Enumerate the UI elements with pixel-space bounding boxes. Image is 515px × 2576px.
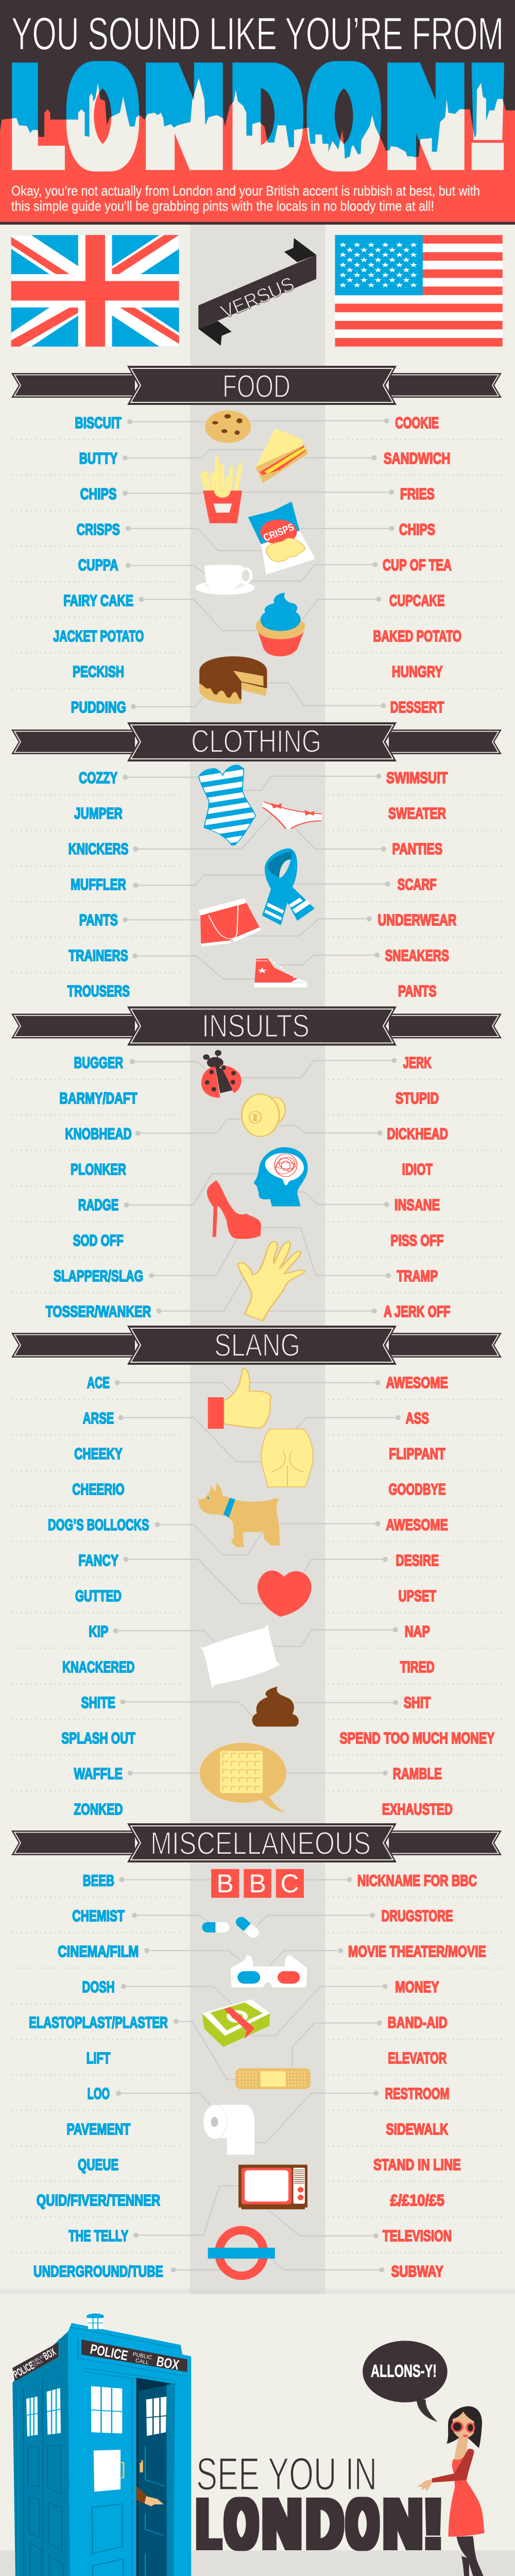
american terms: PANTIES [392,839,442,858]
icon: pillow [199,1624,280,1688]
british terms: TRAINERS [68,946,128,964]
police box signs: CALL [32,2359,44,2367]
icon: underground roundel [208,2230,275,2276]
icon: pills [202,1915,261,1940]
icon: crisps bag [248,502,315,574]
icon: ladybird [201,1050,242,1098]
police box signs [11,2341,180,2381]
british terms: QUID/FIVER/TENNER [37,2191,160,2209]
british terms: TROUSERS [67,981,130,1000]
british terms: PLONKER [71,1160,126,1178]
american terms: BAKED POTATO [373,626,461,645]
panel: header [0,0,515,225]
british terms: GUTTED [75,1586,122,1605]
band below the table [0,2289,515,2294]
american terms: CHIPS [399,520,435,538]
heading: miscellaneous [11,1823,502,1862]
american terms: HUNGRY [392,662,443,681]
american terms: DESIRE [396,1551,439,1569]
connector lines [125,421,391,707]
american terms: TELEVISION [383,2226,452,2245]
british terms: MUFFLER [71,875,126,893]
big word LONDON in blue above the skyline: N [146,36,222,197]
american terms: PISS OFF [390,1231,444,1249]
icon: bulldog [198,1483,280,1547]
icon: cupcake [255,593,305,656]
icon: toilet roll [203,2105,254,2155]
icon: door knob [242,1094,285,1137]
british terms: BUTTY [79,449,117,467]
big word LONDON in blue above the skyline [15,36,508,197]
american terms: SIDEWALK [386,2120,449,2138]
british terms: CHEMIST [72,1906,125,1925]
british terms: PUDDING [71,698,126,716]
british terms: TOSSER/WANKER [46,1302,151,1320]
big word LONDON in cream below the skyline: O [71,36,135,197]
british terms [53,413,144,716]
icon: BBC logo: C [280,1869,299,1898]
icon: scarf [262,849,315,925]
british terms: PAVEMENT [66,2120,130,2138]
american terms: SPEND TOO MUCH MONEY [339,1728,495,1747]
centre column [190,225,325,2294]
text: London! [197,2485,443,2564]
american terms: NAP [405,1622,430,1640]
icon: cookie [205,411,251,443]
american terms: DESSERT [390,698,444,716]
american terms: UPSET [399,1586,436,1605]
american terms: STAND IN LINE [373,2155,461,2174]
american terms: SANDWICH [384,449,450,467]
intro text [11,183,480,214]
icon: hand [238,1242,305,1321]
heading: clothing [11,722,502,761]
intro text: this simple guide you’ll be grabbing pints with the locals in no bloody time at all! [11,198,434,214]
british terms [29,1871,168,2280]
text: London!: O [226,2485,258,2564]
big word LONDON in blue above the skyline: L [15,36,59,197]
icon: high heel [207,1180,261,1239]
british terms [46,1053,151,1320]
american terms: MOVIE THEATER/MOVIE [348,1942,486,1960]
american terms [339,1373,495,1818]
versus ribbon [198,238,316,346]
british terms: CUPPA [78,555,118,574]
british terms: ZONKED [74,1800,123,1818]
american terms: MONEY [395,1977,439,1996]
big word LONDON in cream below the skyline: N [388,36,464,197]
american terms: UNDERWEAR [377,910,457,929]
british terms: LOO [88,2084,110,2103]
big word LONDON in blue above the skyline: D [234,36,299,197]
british terms: QUEUE [78,2155,118,2174]
american terms: GOODBYE [389,1480,445,1498]
icon: bottom [261,1429,313,1487]
dotted row dividers [12,1079,502,1293]
big word LONDON in cream below the skyline: L [15,36,59,197]
british terms: SLAPPER/SLAG [54,1266,143,1285]
connector lines [127,1060,394,1311]
icon: BBC logo: B [216,1869,234,1898]
heading: clothing: CLOTHING [191,724,321,759]
icon: BBC logo: B [249,1869,266,1898]
american terms [373,413,461,716]
text: London!: N [262,2485,302,2564]
american terms: NICKNAME FOR BBC [357,1871,477,1890]
heading: miscellaneous: MISCELLANEOUS [150,1826,371,1861]
american terms: FLIPPANT [389,1444,445,1463]
heading: food [11,366,502,405]
british terms: CHEERIO [72,1480,125,1498]
icon: thumbs up [208,1368,271,1429]
icon: cake [199,656,267,704]
british terms [67,768,130,1000]
american terms: SNEAKERS [385,946,449,964]
american terms: A JERK OFF [384,1302,450,1320]
american terms: AWESOME [386,1515,448,1534]
text: see you in: SEE YOU IN [196,2448,377,2500]
british terms: PANTS [79,910,118,929]
police box signs: POLICE [89,2341,129,2364]
british terms: UNDERGROUND/TUBE [33,2262,163,2280]
american terms: CUP OF TEA [383,555,452,574]
british terms: SHITE [81,1693,115,1711]
icon: fries [200,457,243,523]
american terms: COOKIE [395,413,439,432]
heading: insults [11,1007,502,1046]
american terms: SHIT [404,1693,431,1711]
british terms: JUMPER [74,804,123,822]
american terms: RESTROOM [385,2084,450,2103]
american terms: RAMBLE [393,1764,442,1783]
dotted row dividers [12,795,502,973]
panel: miscellaneous [11,1823,502,2280]
illustration: woman in red dress [417,2406,503,2576]
american terms: FRIES [400,484,435,503]
british terms: SPLASH OUT [61,1728,135,1747]
british terms [48,1373,149,1818]
british terms: BEEB [83,1871,114,1890]
american terms: IDIOT [402,1160,433,1178]
american terms: TIRED [400,1657,435,1676]
british terms: BARMY/DAFT [59,1089,138,1107]
american terms [384,1053,450,1320]
british terms: ARSE [83,1409,114,1427]
big word LONDON in cream below the skyline: D [234,36,299,197]
big word LONDON in cream below the skyline: O [311,36,377,197]
versus ribbon: VERSUS [218,273,298,324]
british terms: JACKET POTATO [53,626,144,645]
panel: insults [11,1007,502,1321]
american terms: JERK [403,1053,432,1072]
police box signs: BOX [41,2346,58,2362]
police box signs: CALL [135,2358,149,2366]
text: London!: D [306,2485,343,2564]
panel: slang [11,1326,502,1818]
american terms: ASS [406,1409,429,1427]
heading: slang [11,1326,502,1365]
american terms: INSANE [394,1195,440,1214]
american terms: AWESOME [386,1373,448,1392]
dotted row dividers [12,439,502,688]
big word LONDON in blue above the skyline: O [71,36,135,197]
american terms: SWIMSUIT [386,768,448,787]
british terms: ACE [87,1373,110,1392]
icon: waffle speech bubble [200,1743,287,1812]
british terms: FAIRY CAKE [63,591,133,609]
icon: crisps bag: CRISPS [262,521,296,544]
icon: boxers [199,898,261,946]
icon: 3D glasses [231,1955,307,1987]
big word LONDON in blue above the skyline: O [311,36,377,197]
british terms: KNOBHEAD [65,1124,132,1143]
icon: poo [252,1687,299,1726]
police box signs: BOX [155,2353,180,2373]
connector lines [116,1383,398,1773]
dotted row dividers [12,1897,502,2252]
british terms: THE TELLY [68,2226,128,2245]
british terms: KNICKERS [68,839,128,858]
british terms: KIP [89,1622,108,1640]
british terms: CHIPS [80,484,116,503]
british terms: PECKISH [73,662,124,681]
icon: plaster [235,2068,311,2089]
speech bubble: ALLONS-Y! [371,2362,437,2381]
text: London!: ! [423,2485,443,2564]
icon: head with scribbled brain [253,1147,308,1206]
icon: television [238,2165,307,2209]
icon: heart [258,1570,312,1617]
big word LONDON in blue above the skyline: ! [468,36,508,197]
icon: panties [263,802,322,829]
icon: sandwich [256,429,308,483]
red London skyline [0,78,515,222]
connector lines [118,1879,385,2270]
british terms: COZZY [79,768,117,787]
big word LONDON in cream below the skyline [12,78,504,172]
british terms: RADGE [78,1195,118,1214]
american terms: CUPCAKE [389,591,445,609]
big word LONDON in cream below the skyline: ! [468,36,508,197]
british terms: SOD OFF [73,1231,124,1249]
american terms [348,1871,486,2280]
panel: clothing [11,722,502,1000]
icon: tea cup [195,565,254,595]
british terms: BISCUIT [75,413,122,432]
american terms: ELEVATOR [388,2048,447,2067]
text: London!: O [347,2485,378,2564]
heading: insults: INSULTS [202,1009,310,1044]
american terms: TRAMP [397,1266,438,1285]
american terms: STUPID [396,1089,439,1107]
british terms: CRISPS [77,520,120,538]
american terms: SCARF [398,875,437,893]
floor [0,2550,515,2576]
icon: sneaker [254,958,307,988]
dotted row dividers [12,1399,502,1791]
american terms: SUBWAY [391,2262,443,2280]
speech bubble [363,2341,448,2422]
british terms: LIFT [87,2048,110,2067]
big word LONDON in cream below the skyline: N [146,36,222,197]
icon: UK flag [11,235,179,347]
police box signs: POLICE [11,2360,36,2381]
american terms: EXHAUSTED [382,1800,453,1818]
american terms: PANTS [398,981,437,1000]
icon: TARDIS police box [11,2314,191,2576]
connector lines [125,776,388,979]
american terms [377,768,457,1000]
police box signs: PUBLIC [132,2351,153,2361]
british terms: DOG’S BOLLOCKS [48,1515,149,1534]
british terms: CHEEKY [74,1444,123,1463]
police box signs: PUBLIC [29,2354,45,2365]
british terms: KNACKERED [62,1657,134,1676]
heading: food: FOOD [222,369,290,404]
american terms: £/£10/£5 [390,2191,444,2209]
american terms: SWEATER [388,804,446,822]
british terms: CINEMA/FILM [58,1942,139,1960]
icon: BBC logo [211,1869,304,1898]
icon: swimsuit [198,765,256,845]
american terms: DRUGSTORE [381,1906,453,1925]
panel: food [11,366,502,716]
panel: flags and versus [11,235,503,347]
heading: slang: SLANG [214,1328,300,1363]
text: London!: L [197,2485,220,2564]
icon: US flag [335,235,503,347]
british terms: WAFFLE [74,1764,123,1783]
american terms: DICKHEAD [387,1124,448,1143]
american terms: BAND-AID [388,2013,448,2031]
british terms: ELASTOPLAST/PLASTER [29,2013,168,2031]
panel: footer scene [0,2314,515,2576]
british terms: FANCY [78,1551,118,1569]
text: London!: N [383,2485,422,2564]
big word LONDON in blue above the skyline: N [388,36,464,197]
british terms: DOSH [82,1977,115,1996]
icon: stack of money [202,1999,270,2047]
british terms: BUGGER [74,1053,123,1072]
